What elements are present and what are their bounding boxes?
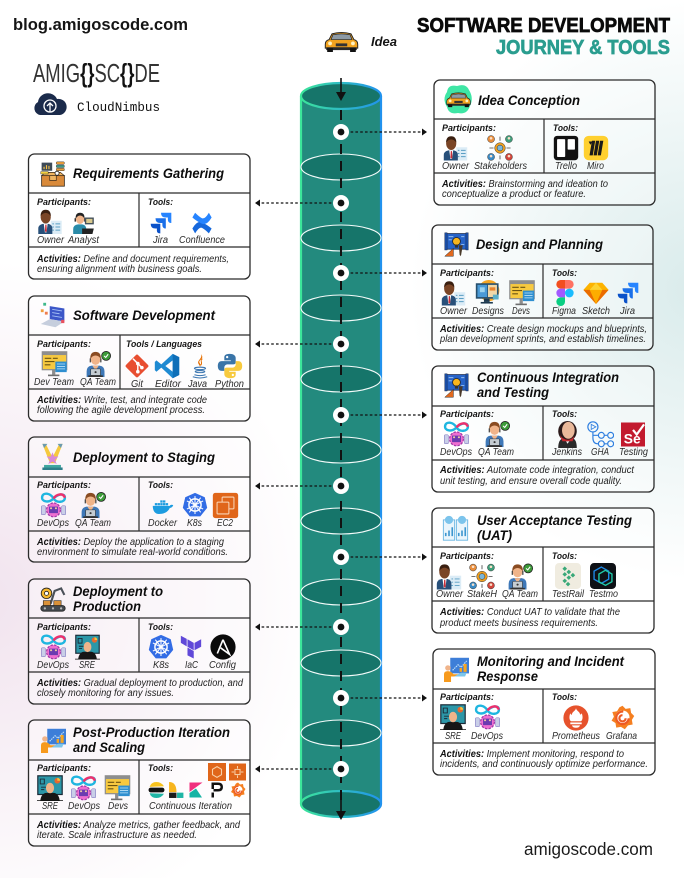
heading: Idea Conception — [478, 93, 580, 109]
labels — [42, 801, 232, 812]
icon: sketch — [583, 283, 609, 304]
heading — [477, 370, 619, 401]
icon: devs — [105, 776, 130, 800]
icon: confluence — [192, 213, 212, 233]
icon: stakeholders — [470, 564, 494, 589]
panel: software development — [28, 296, 250, 421]
activities: incidents, and continuously optimize performance. — [440, 759, 648, 770]
icon: prometheus — [563, 705, 589, 731]
tools heading: Tools: — [148, 763, 173, 774]
icon: blueprint — [445, 233, 468, 256]
tools heading: Tools: — [148, 197, 173, 208]
activities: conceptualize a product or feature. — [442, 189, 586, 200]
heading: Software Development — [73, 308, 216, 324]
icon: devops — [71, 777, 96, 800]
icon: devops — [475, 706, 500, 729]
labels — [436, 589, 619, 600]
icon: laptop — [41, 303, 64, 327]
panel: continuous integration and testing — [432, 366, 654, 492]
icon: logstash — [169, 782, 183, 798]
panel: user acceptance testing — [432, 508, 654, 633]
labels: Trello — [555, 161, 577, 172]
activities — [36, 820, 241, 841]
tools heading: Tools: — [552, 692, 577, 703]
participants heading: Participants: — [440, 551, 494, 562]
labels: SRE — [445, 731, 461, 742]
activities: unit testing, and ensure overall code quality. — [440, 476, 622, 487]
heading: Continuous Integration — [477, 370, 619, 386]
activities: closely monitoring for any issues. — [37, 688, 174, 699]
labels: Stakeholders — [474, 161, 527, 172]
icon: selenium — [621, 422, 645, 447]
labels — [37, 235, 225, 246]
labels: DevOps — [37, 660, 69, 671]
arrow: in — [336, 78, 346, 101]
icon: terraform — [181, 636, 201, 658]
icon: owner — [38, 210, 62, 234]
tools heading: Tools: — [553, 123, 578, 134]
icon: chart presenter — [41, 729, 66, 753]
participants heading: Participants: — [440, 692, 494, 703]
activities — [439, 607, 621, 629]
panel: deployment to production — [28, 579, 250, 704]
icon: sre — [37, 776, 63, 801]
labels: Git — [131, 379, 144, 390]
labels: Grafana — [606, 731, 637, 742]
activities: product meets business requirements. — [439, 618, 598, 629]
heading: Production — [73, 599, 141, 615]
labels: QA Team — [80, 377, 116, 388]
panel: idea conception — [434, 80, 655, 205]
activities — [36, 254, 229, 275]
labels: DevOps — [68, 801, 100, 812]
icon: sre — [75, 635, 100, 660]
labels: EC2 — [217, 518, 233, 529]
icon: kibana — [190, 782, 202, 798]
icon: kubernetes — [149, 635, 173, 658]
heading — [477, 654, 625, 685]
participants heading: Participants: — [37, 339, 91, 350]
icon: sre — [440, 705, 466, 730]
icon: qa team — [87, 351, 111, 377]
activities: Activities: Automate code integration, conduct — [439, 465, 635, 476]
tools heading: Tools: — [552, 409, 577, 420]
icon: miro — [584, 136, 608, 160]
tools heading: Tools: — [148, 622, 173, 633]
heading: Monitoring and Incident — [477, 654, 625, 670]
heading — [73, 725, 230, 756]
icon: jenkins — [558, 421, 577, 448]
icon: blueprint — [445, 374, 468, 397]
participants heading: Participants: — [37, 197, 91, 208]
labels: SRE — [79, 660, 95, 671]
participants heading: Participants: — [37, 480, 91, 491]
labels: Designs — [472, 306, 504, 317]
heading: and Testing — [477, 385, 549, 401]
title — [417, 14, 670, 59]
icon: figma — [556, 280, 574, 306]
labels: Jenkins — [551, 447, 582, 458]
labels: Editor — [155, 379, 182, 390]
participants heading: Participants: — [37, 763, 91, 774]
labels: TestRail — [552, 589, 585, 600]
heading: and Scaling — [73, 740, 145, 756]
labels: Owner — [440, 306, 468, 317]
logo: cloudnimbus: CloudNimbus — [77, 100, 160, 115]
participants heading: Participants: — [442, 123, 496, 134]
icon: grafana — [612, 706, 634, 729]
labels: Owner — [37, 235, 65, 246]
icon: elastic — [149, 782, 164, 798]
icon: jira — [618, 283, 638, 303]
labels: Jira — [152, 235, 169, 246]
activities: following the agile development process. — [37, 405, 205, 416]
activities: Activities: Write, test, and integrate code — [36, 395, 208, 406]
site url: blog: blog.amigoscode.com — [13, 16, 188, 34]
icon: python — [218, 354, 242, 378]
heading: Requirements Gathering — [73, 166, 224, 182]
icon: github actions — [588, 422, 614, 447]
heading: Deployment to — [73, 584, 163, 600]
icon: ec2 — [213, 493, 238, 518]
activities — [36, 395, 208, 416]
tools heading: Tools / Languages — [126, 339, 202, 350]
idea label: Idea — [371, 35, 397, 49]
activities — [439, 749, 648, 770]
icon: vscode — [155, 354, 179, 378]
tools heading: Tools: — [552, 268, 577, 279]
activities: Activities: Deploy the application to a staging — [36, 537, 225, 548]
timeline node connectors — [255, 124, 427, 777]
participants heading: Participants: — [440, 268, 494, 279]
panel: design and planning — [432, 225, 653, 350]
icon: trello — [554, 136, 578, 160]
labels: Testmo — [589, 589, 619, 600]
icon: devops — [41, 494, 66, 517]
heading: Response — [477, 669, 538, 685]
labels: IaC — [185, 660, 199, 671]
panel: post-production iteration and scaling — [28, 720, 250, 846]
labels: QA Team — [75, 518, 111, 529]
icon: testmo — [590, 563, 616, 589]
labels: Owner — [436, 589, 464, 600]
labels: Testing — [619, 447, 649, 458]
icon: idea car — [325, 32, 358, 52]
activities: Activities: Create design mockups and blueprints, — [439, 324, 647, 335]
participants heading: Participants: — [440, 409, 494, 420]
labels: StakeH — [467, 589, 498, 600]
logo: cloudnimbus — [34, 93, 160, 115]
icon: devops — [41, 636, 66, 659]
labels: Config — [209, 660, 237, 671]
activities — [36, 678, 244, 699]
site url: amigoscode: amigoscode.com — [524, 839, 653, 859]
icon: pagerduty — [212, 782, 223, 798]
icon: qa team — [509, 564, 533, 590]
icon: designs — [476, 280, 499, 304]
heading: Post-Production Iteration — [73, 725, 230, 741]
icon: owner — [437, 564, 461, 590]
labels — [440, 447, 649, 458]
activities: Activities: Implement monitoring, respond to — [439, 749, 625, 760]
labels: Docker — [148, 518, 178, 529]
activities: plan development sprints, and establish timelines. — [439, 334, 646, 345]
labels: K8s — [153, 660, 169, 671]
icon: git — [125, 354, 149, 378]
tools heading: Tools: — [552, 551, 577, 562]
icon: requirements — [41, 162, 64, 186]
activities: Activities: Gradual deployment to production, and — [36, 678, 244, 689]
panel: requirements gathering — [28, 154, 250, 279]
labels: Python — [215, 379, 244, 390]
icon: owner — [444, 136, 467, 160]
heading — [477, 513, 632, 544]
icon: owner — [442, 281, 465, 306]
labels: Continuous Iteration — [149, 801, 232, 812]
activities: ensuring alignment with business goals. — [37, 264, 202, 275]
icon: dev team — [42, 352, 67, 376]
icon: qa team — [82, 492, 106, 518]
activities: Activities: Define and document requirements, — [36, 254, 229, 265]
arrow: out — [336, 790, 346, 820]
activities — [439, 465, 635, 487]
labels: Dev Team — [34, 377, 74, 388]
heading: Deployment to Staging — [73, 450, 215, 466]
labels: DevOps — [471, 731, 503, 742]
activities — [441, 179, 609, 200]
labels: Jira — [619, 306, 636, 317]
icon: idea blob — [444, 85, 472, 113]
icon: devops — [444, 423, 469, 446]
heading: Design and Planning — [476, 237, 603, 253]
icon: staging — [42, 444, 63, 470]
icon: analyst — [73, 213, 94, 234]
activities — [439, 324, 647, 345]
activities: environment to simulate real-world conditions. — [37, 547, 228, 558]
labels: Miro — [587, 161, 604, 172]
labels: Confluence — [179, 235, 225, 246]
icon: testrail — [555, 563, 581, 589]
icon: java — [193, 354, 207, 378]
labels — [34, 377, 244, 390]
activities: Activities: Analyze metrics, gather feedback, and — [36, 820, 241, 831]
icon: chart presenter — [444, 658, 469, 682]
icon: kubernetes — [183, 493, 207, 516]
labels: Devs — [108, 801, 128, 812]
labels: GHA — [591, 447, 609, 458]
logo: amigoscode: AMIG{}SC{}DE — [33, 58, 160, 88]
icon: qa team — [486, 421, 510, 447]
labels: SRE — [42, 801, 58, 812]
heading — [73, 584, 163, 615]
labels: QA Team — [502, 589, 538, 600]
icon: stakeholders — [488, 136, 512, 160]
icon: docker — [153, 500, 173, 514]
activities: iterate. Scale infrastructure as needed. — [37, 830, 197, 841]
labels: K8s — [187, 518, 202, 529]
activities: Activities: Conduct UAT to validate that the — [439, 607, 621, 618]
pipeline cylinder — [301, 83, 381, 817]
labels — [442, 161, 604, 172]
icon: robot arm — [41, 588, 65, 611]
icon: ansible — [210, 634, 236, 660]
panel: monitoring and incident response — [433, 649, 655, 775]
labels — [37, 660, 237, 671]
labels: QA Team — [478, 447, 514, 458]
labels: DevOps — [440, 447, 472, 458]
participants heading: Participants: — [37, 622, 91, 633]
labels: Analyst — [67, 235, 100, 246]
icon: aws service 2 — [229, 764, 246, 780]
panel: deployment to staging — [28, 437, 250, 562]
icon: aws service 1 — [208, 763, 226, 781]
labels: Figma — [552, 306, 576, 317]
labels: Prometheus — [552, 731, 600, 742]
labels — [445, 731, 637, 742]
icon: jira — [151, 213, 171, 233]
labels: Sketch — [582, 306, 610, 317]
labels: Owner — [442, 161, 470, 172]
activities: Activities: Brainstorming and ideation to — [441, 179, 609, 190]
labels: Java — [187, 379, 207, 390]
labels — [440, 306, 636, 317]
labels: Devs — [512, 306, 530, 317]
labels — [37, 518, 233, 529]
heading: User Acceptance Testing — [477, 513, 632, 529]
icon: devs — [510, 281, 534, 305]
icon: grafana — [231, 782, 246, 798]
labels: DevOps — [37, 518, 69, 529]
tools heading: Tools: — [148, 480, 173, 491]
icon: uat documents — [443, 516, 468, 540]
activities — [36, 537, 228, 558]
heading: (UAT) — [477, 528, 512, 544]
